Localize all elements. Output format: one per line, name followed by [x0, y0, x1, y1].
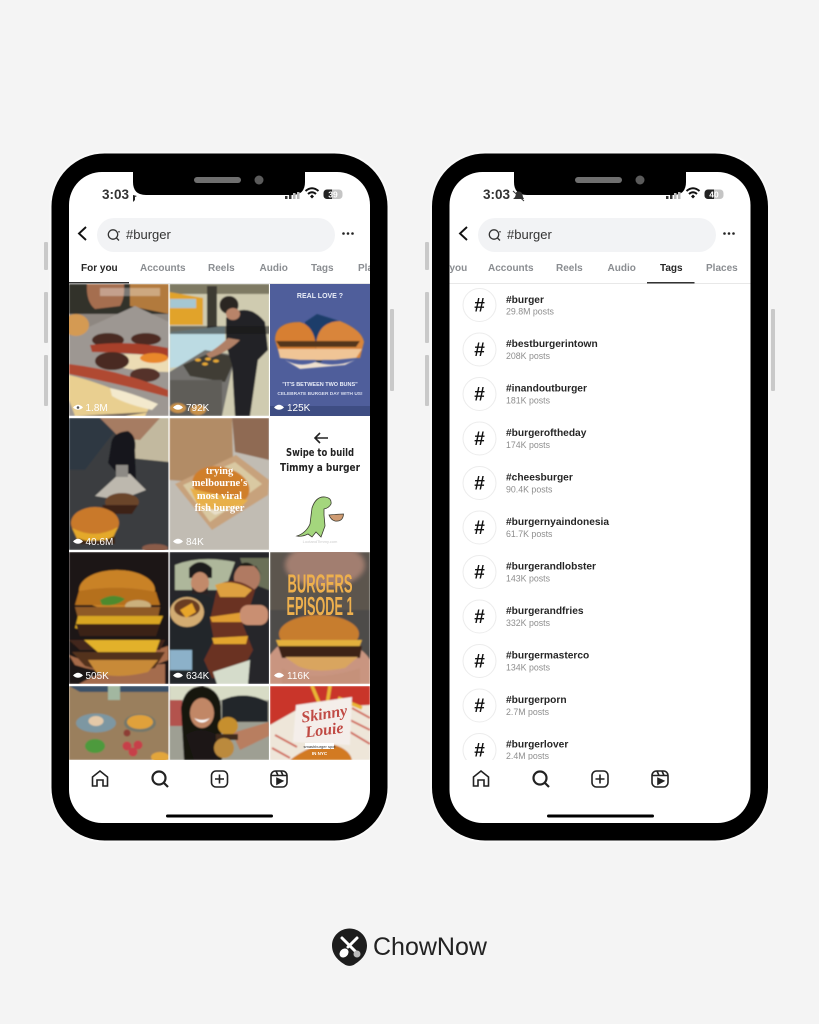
tabs: Reels [208, 263, 235, 274]
photo: chef at griddle [170, 284, 270, 416]
row: #burgerlover [462, 733, 568, 760]
tabs: Audio [608, 263, 636, 274]
tabs [82, 264, 370, 273]
comic text: Timmy a burger [280, 462, 361, 474]
row: #burger [463, 288, 555, 322]
panel: Swipe to build Timmy a burger: LootandTimmy.com [303, 539, 338, 544]
search field [97, 218, 335, 252]
tabs: Tags [311, 263, 334, 274]
back arrow [460, 227, 467, 240]
view count: 40.6M: 40.6M [86, 537, 113, 548]
phone screen [450, 172, 750, 823]
photo: Real Love poster: "IT'S BETWEEN TWO BUNS" [282, 382, 358, 388]
row: #burgeroftheday: # [474, 429, 485, 450]
row: #burgerandlobster [463, 556, 596, 588]
photo: Skinny Louie burger bag [270, 686, 370, 760]
row: #burgerandfries: #burgerandfries [506, 606, 584, 617]
phone body [50, 152, 388, 842]
row: #burgerporn: 2.7M posts [506, 707, 550, 717]
status bar: 39 [328, 190, 338, 200]
bag lettering: Skinny [300, 702, 349, 727]
status bar: 40 [709, 190, 719, 200]
icon: search [534, 772, 549, 787]
phone side buttons [425, 242, 775, 406]
photo: Real Love poster: CELEBRATE BURGER DAY WITH US! [277, 391, 363, 397]
row: #burgerandfries: # [474, 607, 485, 628]
active tab underline [69, 282, 370, 284]
view count: 84K: 84K [186, 537, 204, 548]
photo: stacked cheeseburger [69, 552, 169, 684]
bag caption: IN NYC [312, 751, 328, 756]
row: #burger: # [474, 296, 485, 316]
row: #burgerandlobster: #burgerandlobster [506, 562, 596, 572]
active tab underline [450, 282, 750, 284]
row: #burgerporn: # [474, 696, 485, 717]
row: #burgermasterco: # [474, 652, 485, 672]
view count: 116K [274, 672, 310, 679]
photo: Burgers Episode 1 [270, 543, 370, 684]
phone side buttons [44, 242, 394, 406]
view count: 634K: 634K [186, 671, 210, 682]
row: #inandoutburger: 181K posts [506, 396, 551, 406]
tabs: For you [81, 263, 118, 274]
phone: Instagram search results grid [44, 152, 394, 842]
row: #burgermasterco: #burgermasterco [506, 650, 589, 662]
photo: fish burger in box [170, 418, 270, 550]
overlay headline: melbourne's [192, 478, 247, 489]
phone body [431, 152, 769, 842]
home indicator [547, 814, 654, 818]
search field [478, 218, 716, 252]
tabs: Accounts [488, 263, 534, 274]
photo: hot dog burger on tray [63, 284, 169, 416]
icon: create [592, 771, 608, 787]
view count: 505K: 505K [86, 671, 109, 682]
row: #inandoutburger: #inandoutburger [506, 384, 587, 394]
more menu [342, 232, 354, 235]
row: #burgerporn: #burgerporn [506, 695, 567, 706]
view count: 116K: 116K [287, 671, 310, 682]
hashtag list [463, 288, 609, 766]
photo: Real Love poster [270, 284, 370, 416]
view count: 1.8M: 1.8M [86, 403, 108, 414]
panel: Swipe to build Timmy a burger [270, 418, 370, 550]
row: #bestburgerintown [463, 333, 598, 366]
bottom navigation [92, 771, 287, 787]
status bar [483, 187, 724, 202]
tabs [450, 264, 738, 273]
row: #burgerandfries: 332K posts [506, 618, 551, 628]
row: #bestburgerintown: 208K posts [506, 351, 551, 361]
row: #burgernyaindonesia: 61.7K posts [506, 529, 553, 539]
tabs: Reels [556, 263, 583, 274]
home indicator [166, 814, 273, 818]
row: #burgermasterco [463, 644, 589, 678]
photo: woman holding burger [170, 686, 270, 760]
search field: #burger [507, 227, 552, 242]
notch [133, 172, 305, 195]
icon: pin with crossed fork and spoon [332, 928, 367, 966]
photo: smash burger with press [69, 418, 169, 552]
bag caption [304, 743, 336, 755]
row: #burgerporn [463, 689, 567, 722]
tabs: you [450, 263, 467, 274]
photo: Real Love poster: REAL LOVE ? [297, 293, 343, 300]
tabs: Audio [260, 263, 288, 274]
phone: Instagram hashtag results [425, 152, 775, 842]
photo: table with plates [69, 686, 169, 762]
row: #cheesburger: 90.4K posts [506, 484, 553, 494]
back arrow [79, 227, 86, 240]
row: #burgerandfries [463, 600, 584, 633]
overlay headline: most viral [197, 491, 242, 502]
overlay headline [192, 466, 247, 514]
row: #bestburgerintown: #bestburgerintown [506, 339, 598, 350]
bag caption: smashburger spot [303, 744, 336, 749]
row: #inandoutburger [463, 378, 587, 410]
row: #burgerlover: # [474, 740, 485, 762]
row: #cheesburger [463, 466, 573, 500]
view count: 125K: 125K [287, 403, 311, 414]
overlay headline: fish burger [195, 503, 245, 514]
overlay headline [287, 574, 354, 616]
icon: reels [652, 771, 668, 787]
row: #inandoutburger: # [474, 384, 485, 406]
row: #burgerandlobster: # [474, 562, 485, 584]
icon: create [212, 771, 228, 787]
row: #burgerlover: #burgerlover [506, 740, 568, 750]
tabs: Tags [660, 263, 683, 274]
bag lettering: Louie [303, 720, 344, 741]
row: #burgerandlobster: 143K posts [506, 574, 551, 584]
bag lettering [302, 708, 347, 738]
photo: Burgers Episode 1: EPISODE 1 [286, 591, 354, 621]
tabs: Accounts [140, 263, 186, 274]
overlay headline: BURGERS [288, 568, 352, 598]
row: #burgeroftheday: #burgeroftheday [506, 428, 587, 439]
wordmark: ChowNow [373, 933, 488, 961]
icon: home [92, 771, 108, 786]
icon: green dinosaur with bowl [297, 497, 344, 537]
row: #burgermasterco: 134K posts [506, 662, 551, 672]
icon: reels [271, 771, 287, 787]
status bar: 3:03 [483, 187, 511, 202]
row: #bestburgerintown: # [474, 340, 485, 361]
more menu [723, 232, 735, 235]
row: #burgernyaindonesia: #burgernyaindonesia [506, 517, 609, 528]
row: #burger: 29.8M posts [506, 306, 555, 316]
bottom navigation [474, 771, 668, 787]
view count: 792K: 792K [186, 403, 210, 414]
row: #burgernyaindonesia [463, 511, 609, 544]
overlay headline: trying [206, 466, 234, 477]
row: #burgeroftheday: 174K posts [506, 440, 551, 450]
comic text: Swipe to build [286, 447, 354, 459]
arrow left [315, 433, 328, 443]
row: #cheesburger: #cheesburger [506, 472, 573, 484]
status bar: 3:03 [102, 187, 130, 202]
icon: home [474, 771, 488, 786]
phone screen [69, 172, 370, 823]
row: #burger: #burger [506, 295, 544, 306]
icon: search [152, 772, 168, 787]
row: #cheesburger: # [474, 474, 485, 494]
tabs: Places [358, 263, 390, 274]
photo: friends with burger tower [170, 552, 270, 684]
notch [514, 172, 686, 195]
row: #burgerlover: 2.4M posts [506, 751, 550, 761]
comic text [280, 447, 361, 474]
row: #burgernyaindonesia: # [474, 518, 485, 539]
tabs: Places [706, 263, 738, 274]
ChowNow logo [332, 928, 488, 966]
search field: #burger [126, 227, 171, 242]
row: #burgeroftheday [463, 422, 587, 455]
status bar [102, 187, 342, 202]
